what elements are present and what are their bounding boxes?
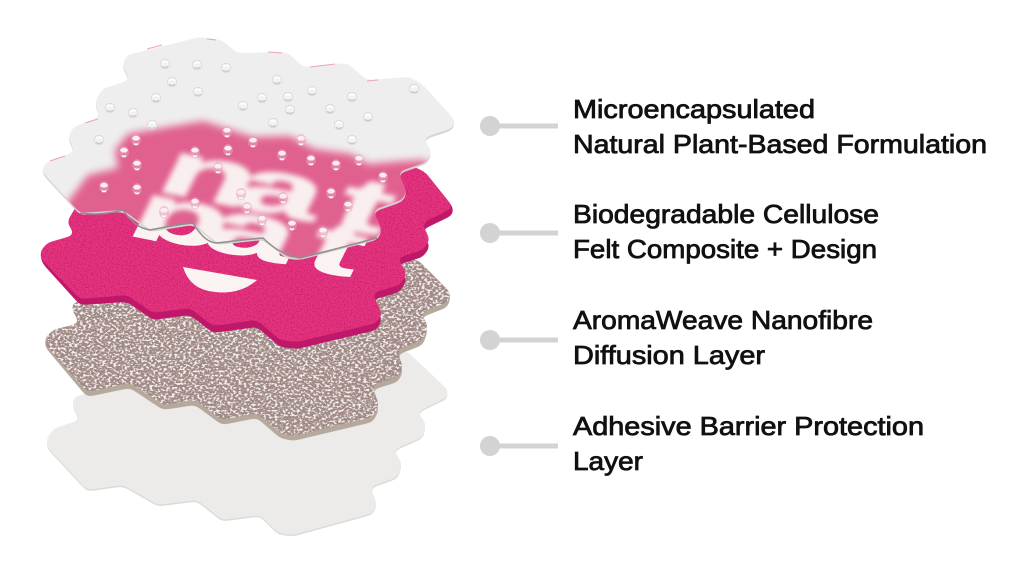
felt logo and smile: pat <box>117 167 383 292</box>
layer: clear microencapsulated formulation <box>43 38 454 260</box>
callout: microencapsulated formulation: Natural Plant-Based Formulation <box>573 129 987 159</box>
callout: microencapsulated formulation: Microencapsulated <box>573 94 815 124</box>
callout: aromaweave <box>480 305 873 370</box>
felt logo and smile <box>132 224 366 292</box>
blurred logo through the film: nat <box>145 125 411 250</box>
film front edge <box>80 210 377 258</box>
callout: cellulose felt: Biodegradable Cellulose <box>573 199 879 229</box>
callout: adhesive barrier: Adhesive Barrier Protection <box>573 411 924 441</box>
layer: adhesive barrier protection <box>47 340 448 536</box>
callout: adhesive barrier: Layer <box>573 446 643 476</box>
callout: microencapsulated formulation <box>480 94 987 159</box>
callout: aromaweave: Diffusion Layer <box>573 340 765 370</box>
callout: aromaweave: AromaWeave Nanofibre <box>573 305 873 335</box>
layer: aromaweave nanofibre <box>45 250 451 441</box>
blurred felt seen through the film <box>65 116 429 258</box>
microcapsule droplets <box>94 59 419 238</box>
pink reflections on back edge <box>50 39 378 161</box>
callout: adhesive barrier <box>480 411 924 476</box>
callout: cellulose felt: Felt Composite + Design <box>573 234 877 264</box>
layer: cellulose felt <box>40 168 453 349</box>
callout: cellulose felt <box>480 199 879 264</box>
blurred logo through the film: pat <box>117 167 383 292</box>
